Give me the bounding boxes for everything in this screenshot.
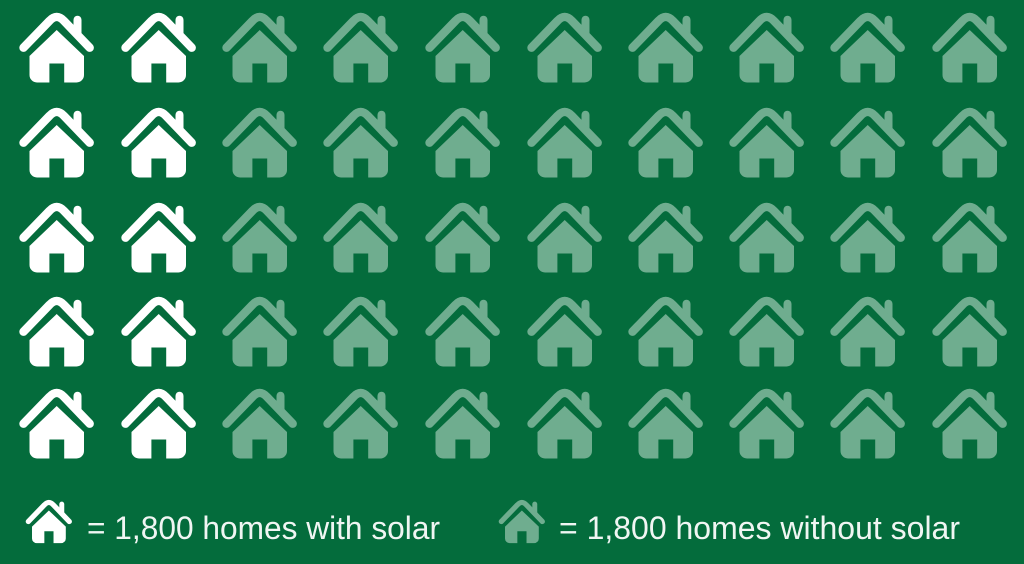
house grid <box>24 16 1003 458</box>
icon: white house <box>28 502 69 543</box>
row 1 <box>24 16 1003 83</box>
row 2 <box>24 111 1003 178</box>
legend text: without solar: = 1,800 homes without solar <box>559 510 960 546</box>
row 4 <box>24 300 1003 366</box>
icon: faded house <box>501 502 542 543</box>
row 3 <box>24 206 1003 272</box>
row 5 <box>24 392 1003 458</box>
legend: homes without solar <box>501 502 960 546</box>
legend: homes with solar <box>28 502 440 546</box>
legend text: with solar: = 1,800 homes with solar <box>87 510 440 546</box>
